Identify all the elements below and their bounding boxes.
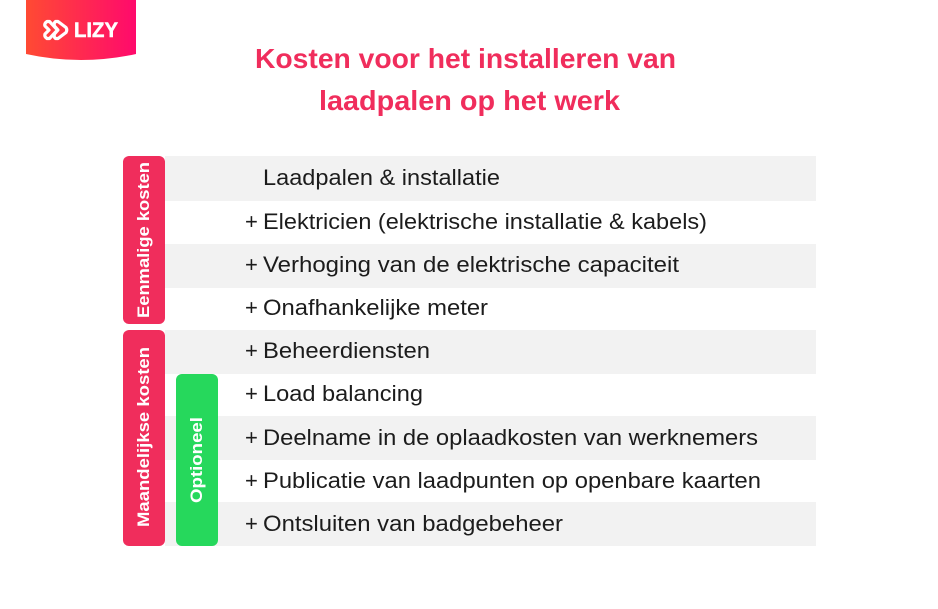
item: Elektricien: + — [245, 209, 258, 234]
item: Deelname: Deelname in de oplaadkosten van werknemers — [263, 425, 758, 450]
logo text: LIZY — [74, 19, 118, 42]
cost items list — [245, 165, 761, 536]
item: Publicatie: + — [245, 468, 258, 493]
item: Onafhankelijke meter: Onafhankelijke meter — [263, 295, 488, 320]
icon: double chevron heart — [45, 22, 67, 38]
item: Load balancing: + — [245, 381, 258, 406]
item: Ontsluiten: Ontsluiten van badgebeheer — [263, 511, 563, 536]
label: Maandelijkse kosten: Maandelijkse kosten — [134, 347, 153, 527]
title: Kosten voor het installeren van — [255, 43, 676, 74]
item: Beheerdiensten: Beheerdiensten — [263, 338, 430, 363]
item: Elektricien: Elektricien (elektrische installatie & kabels) — [263, 209, 707, 234]
item: Verhoging: + — [245, 252, 258, 277]
item: Verhoging: Verhoging van de elektrische capaciteit — [263, 252, 679, 277]
item: Load balancing: Load balancing — [263, 381, 423, 406]
logo: LIZY — [26, 0, 136, 60]
item: Ontsluiten: + — [245, 511, 258, 536]
item: Deelname: + — [245, 425, 258, 450]
item: Onafhankelijke meter: + — [245, 295, 258, 320]
title: laadpalen op het werk — [319, 85, 620, 116]
label: Optioneel — [176, 374, 218, 546]
label: Maandelijkse kosten — [123, 330, 165, 546]
item: Beheerdiensten: + — [245, 338, 258, 363]
item: Laadpalen & installatie: Laadpalen & installatie — [263, 165, 500, 190]
table row backgrounds — [165, 156, 816, 546]
item: Publicatie: Publicatie van laadpunten op openbare kaarten — [263, 468, 761, 493]
label: Eenmalige kosten — [123, 156, 165, 324]
title — [255, 43, 676, 116]
label: Optioneel: Optioneel — [187, 417, 206, 503]
label: Eenmalige kosten: Eenmalige kosten — [134, 162, 153, 318]
